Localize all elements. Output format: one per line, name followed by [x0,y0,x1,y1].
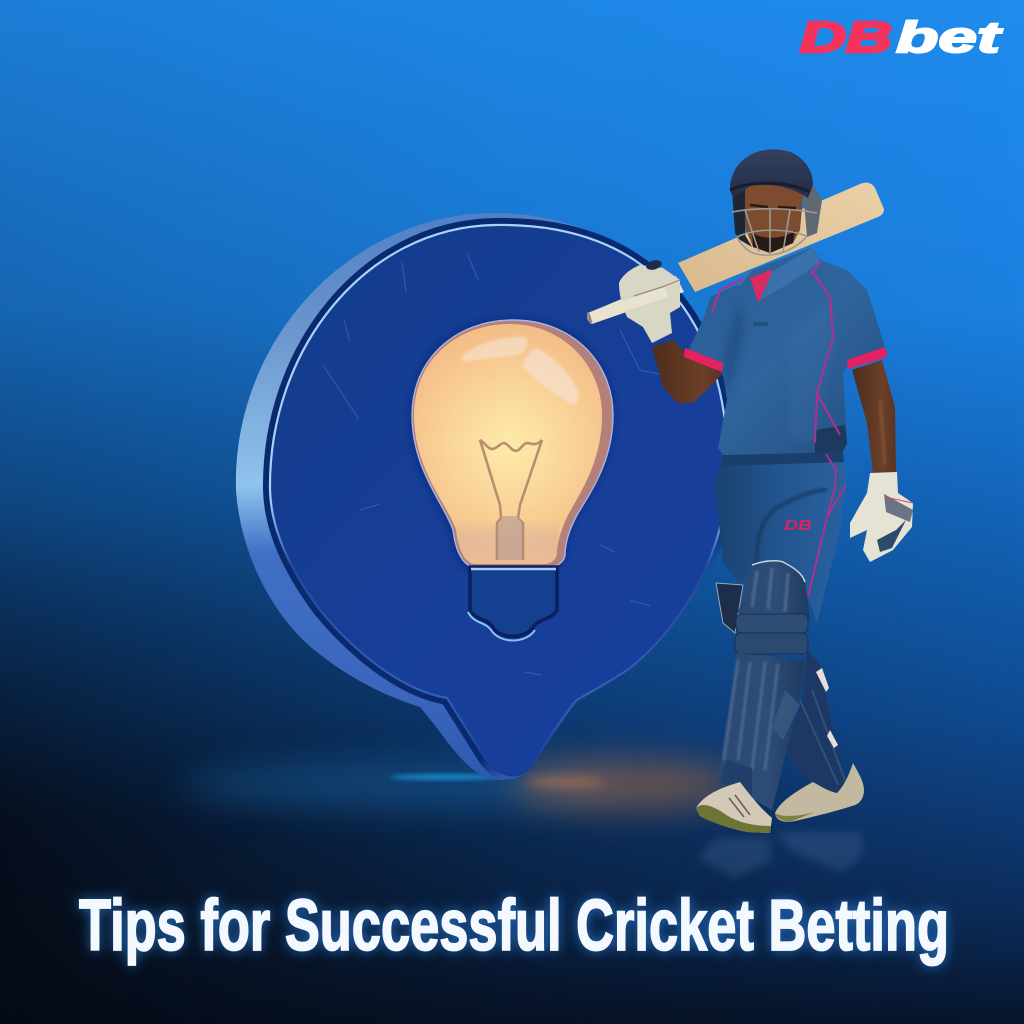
bulb base [468,567,557,640]
helmet grille [732,208,817,255]
back leg pad [787,650,847,793]
piping [712,262,840,443]
top glove [587,259,680,343]
bulb halo [408,316,616,572]
logo: DB: DB [800,13,892,62]
helmet [730,149,822,255]
front shoe [696,782,772,833]
bottom glove [850,472,913,562]
floor glow [180,761,740,809]
waistband shade [722,452,844,466]
light bulb [408,316,616,640]
right arm [852,360,896,473]
cricket player [587,149,913,878]
glass highlights [462,337,527,362]
bubble rim [236,213,727,780]
bat [587,183,884,324]
filament [480,440,542,560]
filament stem [498,516,522,560]
arm highlight [880,400,885,465]
back shoe [775,763,864,822]
bulb neck shade [456,520,561,564]
pink cuffs [684,348,723,372]
bubble groove [270,225,728,775]
speech bubble [236,213,728,780]
holding arm [652,340,723,403]
pants logo: DB [784,517,812,534]
logo: bet: bet [896,13,1004,62]
scratches [323,253,690,675]
pants [715,452,846,623]
front leg pad [717,561,810,810]
back thigh pad [716,583,743,633]
bulb back edge [412,320,613,567]
bulb glass [414,324,602,564]
placket [753,322,768,326]
jersey [684,247,887,455]
jersey shading [723,300,745,400]
face [745,184,804,253]
collar opening [750,270,787,302]
bubble face [270,225,728,775]
shoe reflections [698,832,864,878]
logo [800,13,1004,62]
jersey side shade [815,425,847,453]
